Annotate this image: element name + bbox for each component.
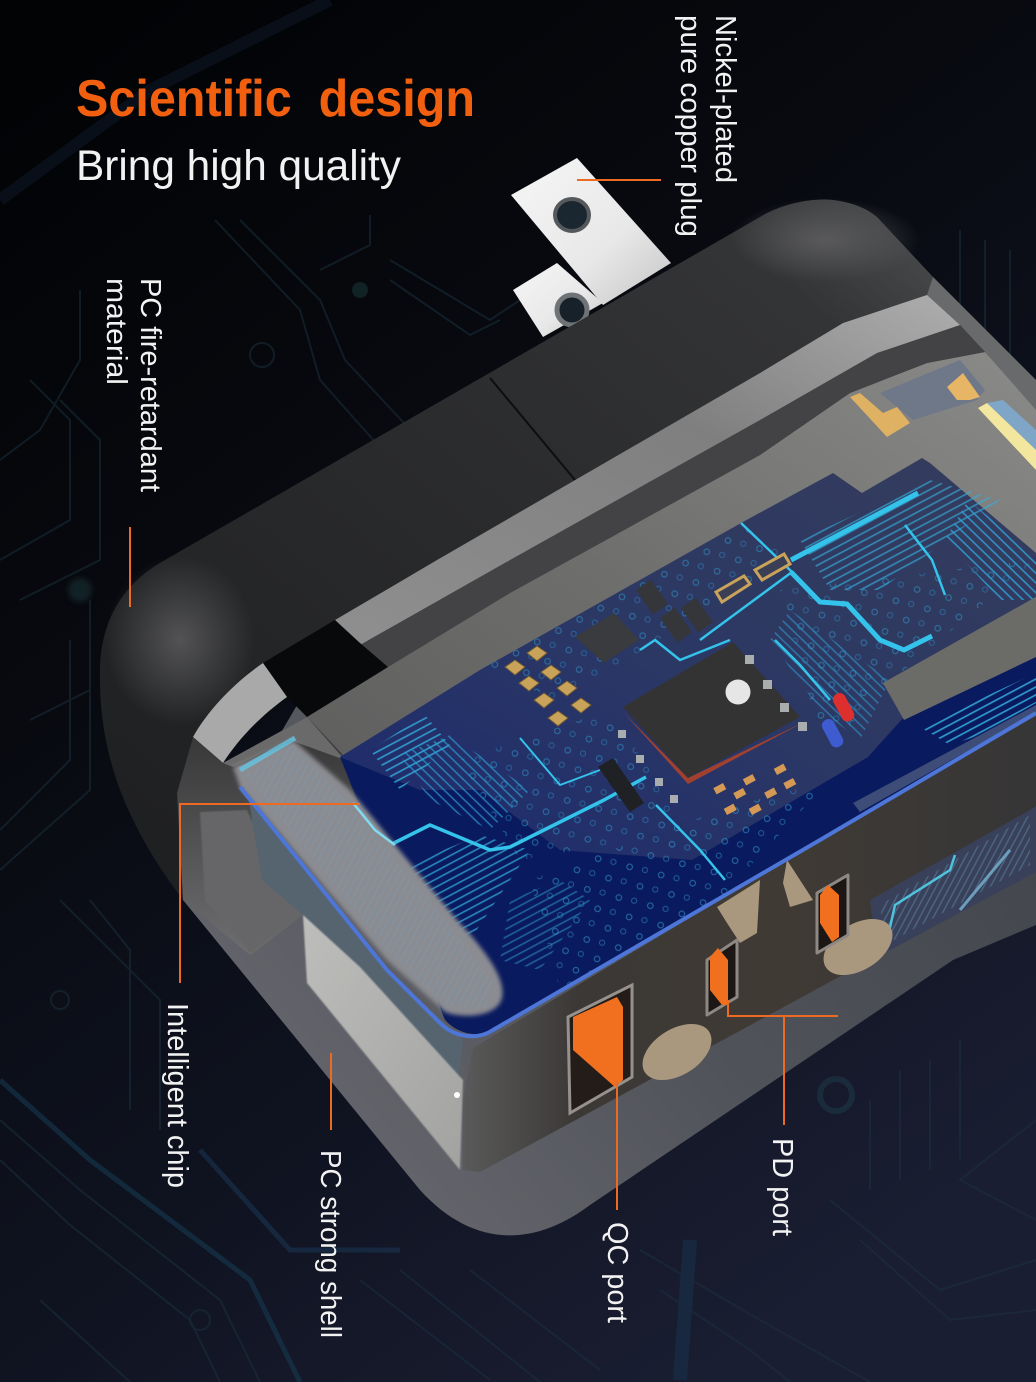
- right board strip: [853, 597, 1036, 812]
- callout: PD port: PD port: [766, 1138, 798, 1236]
- callout: intelligent chip: [161, 804, 360, 1188]
- callout: nickel-plated pure copper plug: pure copper plug: [674, 15, 706, 237]
- upper circuit board: [340, 458, 1036, 990]
- small IC: [598, 758, 644, 812]
- left side inner circuit strip: [248, 795, 463, 1090]
- subtitle: Bring high quality: [76, 142, 401, 190]
- bright cyan traces: [353, 493, 945, 880]
- gold pads: [505, 646, 591, 726]
- trace bundles: [370, 715, 450, 790]
- glass blue edge: [240, 713, 1036, 1036]
- MOSFET capacitors: [636, 580, 713, 642]
- tan connectors: [633, 860, 902, 1092]
- body top-right highlight: [730, 198, 920, 282]
- blue component: [820, 717, 845, 750]
- navy lower circuit board: [340, 655, 1036, 1034]
- light inner cylinder component: [233, 738, 503, 1016]
- main chip: [618, 642, 807, 803]
- housing seam: [490, 378, 575, 480]
- callout: nickel-plated pure copper plug: [577, 15, 741, 237]
- callout: QC port: QC port: [601, 1222, 633, 1323]
- dark inner strip: [360, 325, 985, 667]
- body highlight: [105, 555, 255, 725]
- grey band: [335, 295, 960, 645]
- right glass rim: [927, 277, 1036, 410]
- tan round stud left: [633, 1012, 721, 1092]
- callout: PD port: [728, 1000, 838, 1236]
- gold resistor packs: [716, 554, 790, 602]
- left panel light block: [303, 915, 463, 1170]
- via fields: [480, 523, 790, 700]
- front pin: [511, 158, 671, 305]
- QC USB-A port: [568, 985, 632, 1113]
- black upper housing: [100, 198, 933, 900]
- gold internal parts: [850, 373, 1036, 470]
- callout: PC fire-retardant material: PC fire-retardant: [134, 278, 166, 492]
- orange smd pads: [713, 764, 796, 815]
- left grey band: [193, 663, 287, 763]
- back pin: [513, 263, 603, 337]
- callout: PC strong shell: PC strong shell: [314, 1150, 346, 1338]
- right front circuit: [870, 806, 1036, 957]
- PD USB-C port 2: [817, 875, 848, 953]
- translucent left chamber: [177, 717, 400, 955]
- PD USB-C port 1: [707, 940, 737, 1015]
- black clip: [263, 620, 388, 717]
- blue-grey internal part: [880, 360, 985, 420]
- callout: intelligent chip: Intelligent chip: [161, 1003, 193, 1188]
- callout: PC fire-retardant material: material: [100, 278, 132, 385]
- callout: nickel-plated pure copper plug: Nickel-plated: [709, 15, 741, 183]
- front face with ports: [303, 716, 1036, 1172]
- SOIC chip: [575, 613, 639, 663]
- plug pins: [511, 158, 671, 337]
- corner highlight: [454, 1092, 460, 1098]
- red component: [831, 691, 856, 724]
- translucent outer shell: [183, 277, 1036, 1235]
- glass upper area above circuit board: [193, 277, 1036, 900]
- title: Scientific design: [76, 70, 475, 128]
- tan round stud right: [814, 907, 902, 987]
- callout: PC fire-retardant material: [100, 278, 166, 607]
